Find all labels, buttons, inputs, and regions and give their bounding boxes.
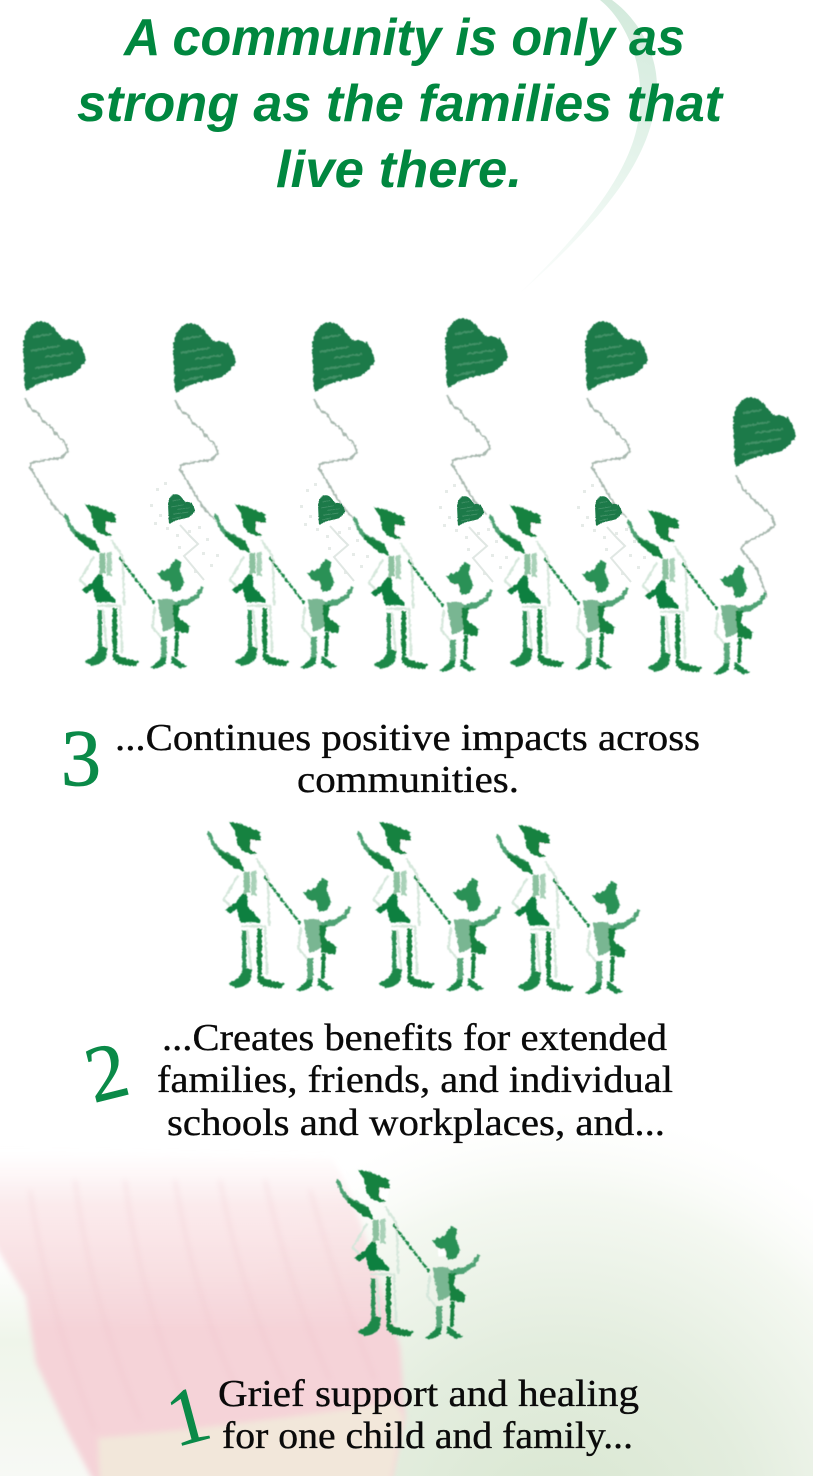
step 2 text: schools and workplaces, and... xyxy=(167,1102,665,1144)
family 5 xyxy=(627,510,767,675)
small faded balloon 3 xyxy=(439,484,508,582)
balloon 2 xyxy=(173,324,236,520)
balloon 5 xyxy=(585,322,648,518)
small faded balloon 4 xyxy=(577,484,646,582)
family 1 xyxy=(207,821,352,991)
family 3 xyxy=(353,507,493,672)
step 2 text xyxy=(157,1017,673,1144)
family 4 xyxy=(489,505,629,670)
step 2 illustration: three families xyxy=(207,821,641,994)
step 3 number: 3 xyxy=(61,715,101,803)
balloon 1 xyxy=(23,322,86,518)
small faded balloon 2 xyxy=(300,483,369,581)
title: A community is only as xyxy=(122,9,685,67)
step 1 number: 1 xyxy=(158,1369,219,1465)
step 2 text: families, friends, and individual xyxy=(157,1059,673,1101)
decorative swirl behind title xyxy=(520,0,657,293)
step 1 text: Grief support and healing xyxy=(218,1373,639,1415)
balloon 4 xyxy=(445,319,508,515)
balloon 6 held by last child xyxy=(733,398,796,597)
title xyxy=(77,9,725,199)
step 3 text xyxy=(115,717,700,801)
small faded balloon 1 xyxy=(150,482,219,580)
step 2 number: 2 xyxy=(77,1025,137,1120)
step 1 text xyxy=(218,1373,639,1457)
step 3 text: ...Continues positive impacts across xyxy=(115,717,700,759)
family 1 xyxy=(64,504,204,669)
family 2 xyxy=(214,504,354,669)
step 3 illustration: five families with heart balloons xyxy=(23,319,796,675)
step 2 text: ...Creates benefits for extended xyxy=(162,1017,667,1059)
family 3 xyxy=(496,824,641,994)
title: strong as the families that xyxy=(77,75,725,133)
step 1 illustration: one family xyxy=(336,1169,481,1339)
background photo: sleeve and meadow xyxy=(0,1170,813,1476)
family 2 xyxy=(357,821,502,991)
balloon 3 xyxy=(312,323,375,519)
step 1 text: for one child and family... xyxy=(222,1415,633,1457)
step 3 text: communities. xyxy=(297,759,519,801)
title: live there. xyxy=(276,141,522,199)
